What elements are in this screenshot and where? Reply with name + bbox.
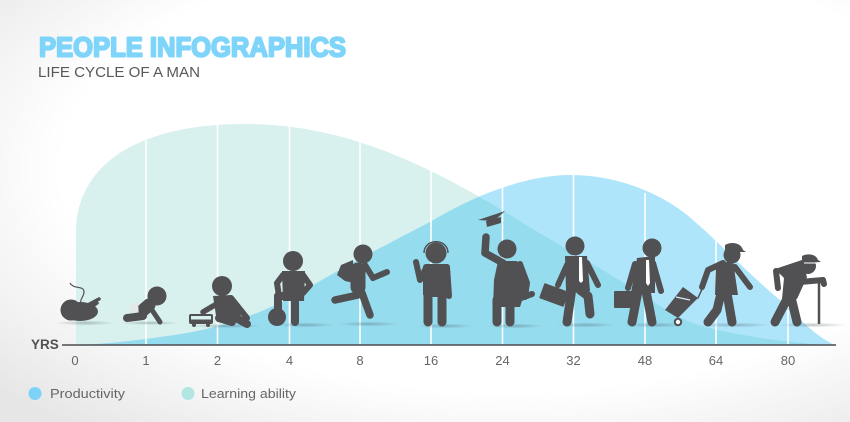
tick labels: 80 [781, 353, 795, 368]
figure: teen with headphones, age 16 [416, 242, 449, 322]
area: overlap [92, 196, 815, 344]
tick labels: 24 [495, 353, 510, 368]
icon: briefcase [539, 283, 569, 307]
figure: graduate, age 24 [478, 211, 532, 322]
figure: running child, age 8 [335, 244, 387, 315]
ground shadows [55, 320, 846, 328]
tick labels [71, 353, 795, 368]
axis label: YRS [31, 337, 59, 352]
figure: crawling baby, age 1 [127, 286, 166, 322]
figure: boy with ball, age 4 [268, 251, 310, 326]
figure: fetus, age 0 [60, 283, 99, 321]
figure: man with briefcase, age 32 [539, 236, 598, 322]
icon: briefcase [614, 291, 635, 308]
area: productivity [76, 175, 835, 345]
icon: toy bus [189, 314, 213, 327]
tick labels: 8 [356, 353, 364, 368]
tick labels: 1 [142, 353, 150, 368]
legend: learning ability: Learning ability [201, 386, 297, 401]
figure: sitting toddler, age 2 [203, 276, 247, 324]
legend: productivity: Productivity [50, 386, 126, 401]
chart: area curves [76, 124, 835, 345]
figure: traveller with luggage, age 64 [665, 243, 750, 325]
tick labels: 16 [424, 353, 438, 368]
icon: mortarboard cap [478, 211, 505, 227]
area: learning ability [76, 124, 827, 345]
tick labels: 2 [214, 353, 221, 368]
title: PEOPLE INFOGRAPHICS [39, 32, 346, 62]
tick labels: 4 [286, 353, 293, 368]
subtitle: LIFE CYCLE OF A MAN [38, 65, 200, 81]
x axis [31, 337, 836, 368]
legend: productivity [28, 386, 126, 401]
tick labels: 48 [638, 353, 652, 368]
tick labels: 32 [566, 353, 581, 368]
figure: old man with cane, age 80 [775, 254, 824, 324]
icon: rolling suitcase [665, 287, 703, 325]
tick labels: 64 [709, 353, 723, 368]
tick labels: 0 [71, 353, 79, 368]
figure: man with case, age 48 [614, 238, 662, 322]
legend [28, 386, 297, 401]
